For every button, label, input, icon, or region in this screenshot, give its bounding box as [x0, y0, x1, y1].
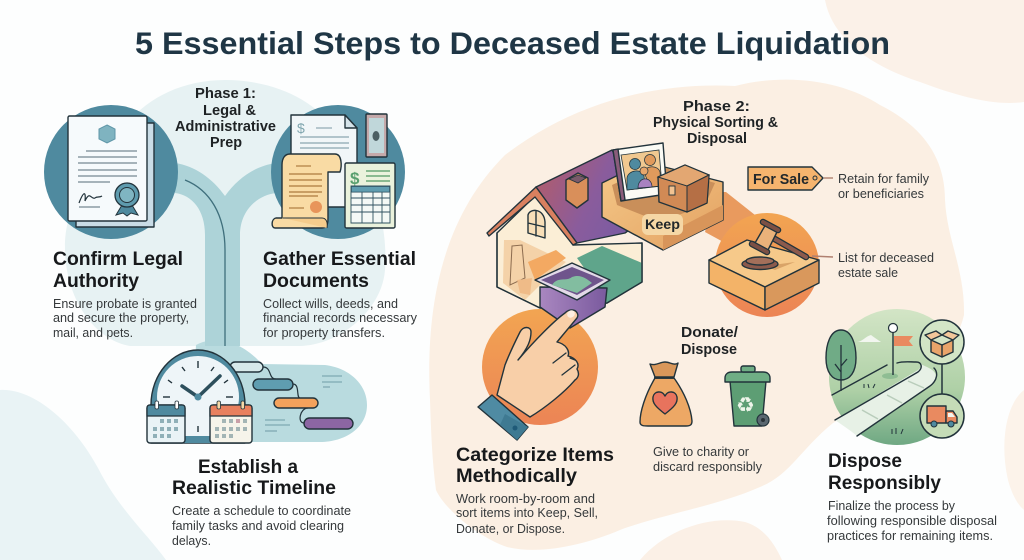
text: categorize items methodically: Methodically [456, 465, 577, 487]
text: confirm legal authority: and secure the property, [53, 311, 189, 325]
title: 5 Essential Steps to Deceased Estate Liquidation [135, 25, 890, 61]
text: categorize items methodically: Donate, or Dispose. [456, 522, 565, 536]
calendar left [147, 401, 185, 443]
text: list for sale [838, 251, 934, 280]
text: establish a realistic timeline: Establish a [198, 456, 298, 478]
text: gather essential documents: Documents [263, 270, 369, 292]
text: confirm legal authority [53, 248, 197, 340]
panel: phase 1 background [65, 80, 385, 442]
text: categorize items methodically: Categorize Items [456, 444, 614, 466]
icon: pointing hand [478, 263, 610, 440]
icon: house [487, 150, 650, 308]
text: establish a realistic timeline: Realistic Timeline [172, 477, 336, 499]
heading: phase 1 [175, 86, 276, 151]
heading: donate or dispose: Donate/ [681, 325, 738, 341]
icon: essential documents: $ [350, 169, 360, 188]
basket [535, 263, 610, 328]
timeline backdrop [190, 340, 367, 442]
panel: phase 2 background [429, 80, 964, 550]
icon: essential documents: $ [297, 120, 305, 136]
truck node [920, 394, 964, 438]
background blob: right edge peach [1004, 390, 1024, 510]
text: confirm legal authority: Ensure probate is granted [53, 297, 197, 311]
icon: timeline clock and calendars [147, 350, 353, 443]
arrow band: keep to sale [705, 192, 755, 250]
text: gather essential documents: for property transfers. [263, 326, 385, 340]
connector: auction [812, 256, 833, 257]
text: dispose responsibly: Responsibly [828, 472, 941, 494]
box node [920, 320, 964, 394]
text: gather essential documents [263, 248, 418, 340]
small chest [658, 165, 709, 212]
text: establish a realistic timeline: family tasks and avoid clearing [172, 519, 344, 533]
icon: essential documents [271, 105, 405, 239]
text: confirm legal authority: mail, and pets. [53, 326, 133, 340]
tree [826, 330, 856, 380]
icon: for sale tag: For Sale [753, 171, 809, 188]
heading: phase 2: Disposal [687, 131, 747, 147]
gantt bars [230, 362, 353, 431]
text: dispose responsibly: Dispose [828, 450, 902, 472]
window [528, 210, 545, 238]
text: list for sale: List for deceased [838, 251, 934, 265]
text: give to charity: discard responsibly [653, 460, 763, 474]
chimney [566, 173, 588, 208]
background blob: top right peach [825, 0, 1024, 103]
grass [864, 384, 903, 434]
connector: for sale [824, 177, 833, 179]
branch line [185, 180, 225, 346]
text: gather essential documents: Collect wills, deeds, and [263, 297, 398, 311]
keep label: Keep [645, 216, 680, 232]
text: establish a realistic timeline: delays. [172, 534, 211, 548]
icon: auction gavel on box [709, 213, 819, 317]
text: categorize items methodically: Work room-by-room and [456, 492, 595, 506]
calendar right [210, 401, 252, 443]
heading: donate or dispose: Dispose [681, 342, 737, 358]
heading: phase 1: Phase 1: [195, 86, 256, 102]
text: gather essential documents: financial records necessary [263, 311, 418, 325]
icon: donation bag [640, 362, 692, 426]
road [835, 362, 936, 436]
text: give to charity [653, 445, 763, 474]
heading: donate or dispose [681, 325, 738, 358]
heading: phase 1: Administrative [175, 119, 276, 135]
text: retain for family: Retain for family [838, 172, 930, 186]
background blob: bottom left blue [0, 390, 166, 560]
text: dispose responsibly: following responsible disposal [827, 514, 997, 528]
text: categorize items methodically: sort items into Keep, Sell, [456, 506, 598, 520]
photo frame [613, 143, 667, 201]
icon: recycling bin [725, 366, 770, 426]
text: gather essential documents: Gather Essential [263, 248, 416, 270]
heading: phase 2 [653, 99, 779, 147]
text: retain for family [838, 172, 930, 201]
heading: phase 2: Phase 2: [683, 99, 750, 115]
icon: recycling bin: ♻ [736, 394, 755, 417]
text: confirm legal authority: Confirm Legal [53, 248, 183, 270]
text: establish a realistic timeline [172, 456, 351, 548]
background blob: bottom centre peach [640, 520, 782, 560]
text: dispose responsibly: Finalize the process by [828, 499, 956, 513]
flag [882, 373, 898, 379]
icon: legal certificate [44, 105, 178, 239]
text: dispose responsibly [827, 450, 997, 543]
text: categorize items methodically [456, 444, 614, 536]
text: confirm legal authority: Authority [53, 270, 139, 292]
cloud [857, 335, 881, 342]
text: establish a realistic timeline: Create a schedule to coordinate [172, 504, 351, 518]
icon: keep box [602, 143, 723, 250]
gavel [752, 222, 806, 257]
text: retain for family: or beneficiaries [838, 187, 924, 201]
icon: for sale tag [748, 167, 823, 190]
text: give to charity: Give to charity or [653, 445, 749, 459]
heading: phase 2: Physical Sorting & [653, 115, 779, 131]
heading: phase 1: Prep [210, 135, 242, 151]
icon: responsible disposal path [826, 309, 965, 445]
heading: phase 1: Legal & [203, 103, 257, 119]
Y-shaped branch [175, 163, 276, 346]
text: list for sale: estate sale [838, 266, 898, 280]
text: dispose responsibly: practices for remaining items. [827, 529, 993, 543]
